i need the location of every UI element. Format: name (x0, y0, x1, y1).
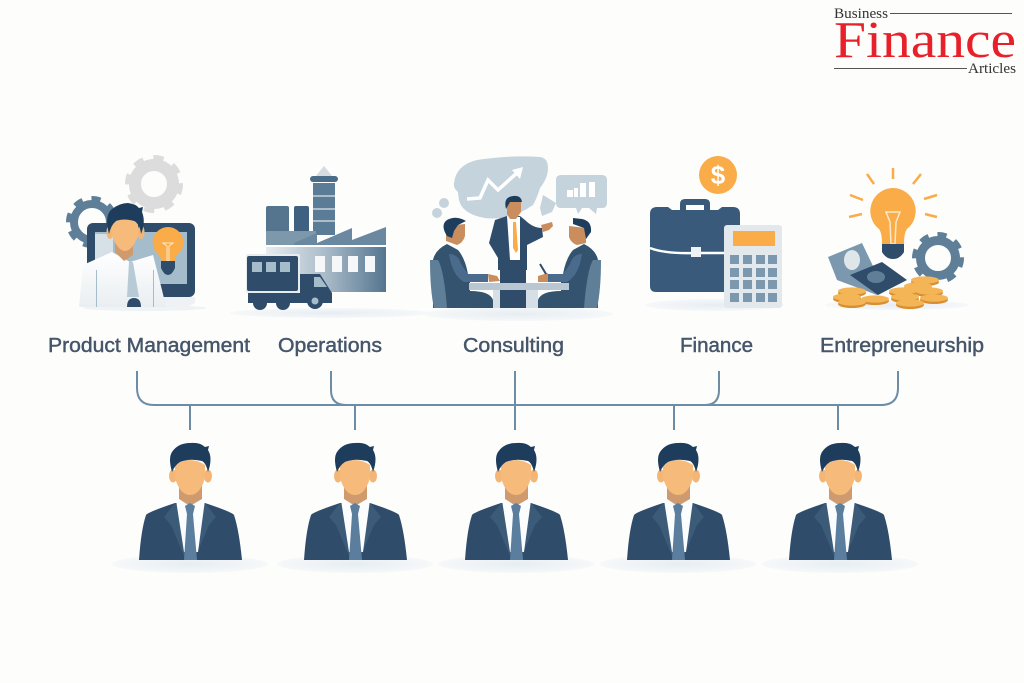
label: Product Management: Product Management (48, 335, 250, 357)
person 4 (600, 443, 756, 573)
person 3 (438, 443, 594, 573)
person 5 (762, 443, 918, 573)
logo: Business Finance Articles: Finance (834, 12, 1016, 69)
icon: light bulb (153, 227, 183, 275)
left seated man (430, 218, 500, 308)
speech bubble with chart arrow (432, 156, 556, 218)
connector lines (137, 371, 898, 430)
icon: blue gear (68, 198, 116, 246)
label: Entrepreneurship: Entrepreneurship (820, 335, 984, 357)
calculator (724, 225, 782, 308)
gear (915, 235, 961, 281)
small speech bubble with bars (556, 175, 607, 214)
table (469, 283, 569, 290)
person 1 (112, 443, 268, 573)
label: Finance: Finance (680, 335, 753, 357)
truck (246, 254, 332, 310)
logo: Business Finance Articles: Articles (968, 61, 1016, 77)
coin stacks (833, 276, 948, 309)
icon: consulting meeting (423, 156, 613, 321)
person in white shirt (79, 203, 166, 307)
icon: finance briefcase and calculator (645, 156, 785, 311)
person 2 (277, 443, 433, 573)
briefcase (650, 199, 740, 292)
monitor (87, 223, 195, 297)
label: Consulting: Consulting (463, 335, 564, 357)
dollar coin: $ (711, 160, 726, 190)
icon: operations factory and truck (230, 166, 430, 318)
label: Operations: Operations (278, 335, 382, 357)
standing presenter (489, 196, 553, 308)
light bulb (870, 188, 916, 259)
right seated man (538, 218, 601, 308)
icon: gray gear (128, 158, 180, 210)
light rays (849, 168, 937, 217)
icon: entrepreneurship bulb, gear, money (825, 168, 969, 310)
banknotes (828, 243, 907, 295)
table pedestal (493, 290, 538, 308)
factory (266, 166, 386, 292)
dollar coin (699, 156, 737, 194)
logo: Business Finance Articles: Business (834, 6, 888, 22)
icon: product management (68, 158, 207, 311)
